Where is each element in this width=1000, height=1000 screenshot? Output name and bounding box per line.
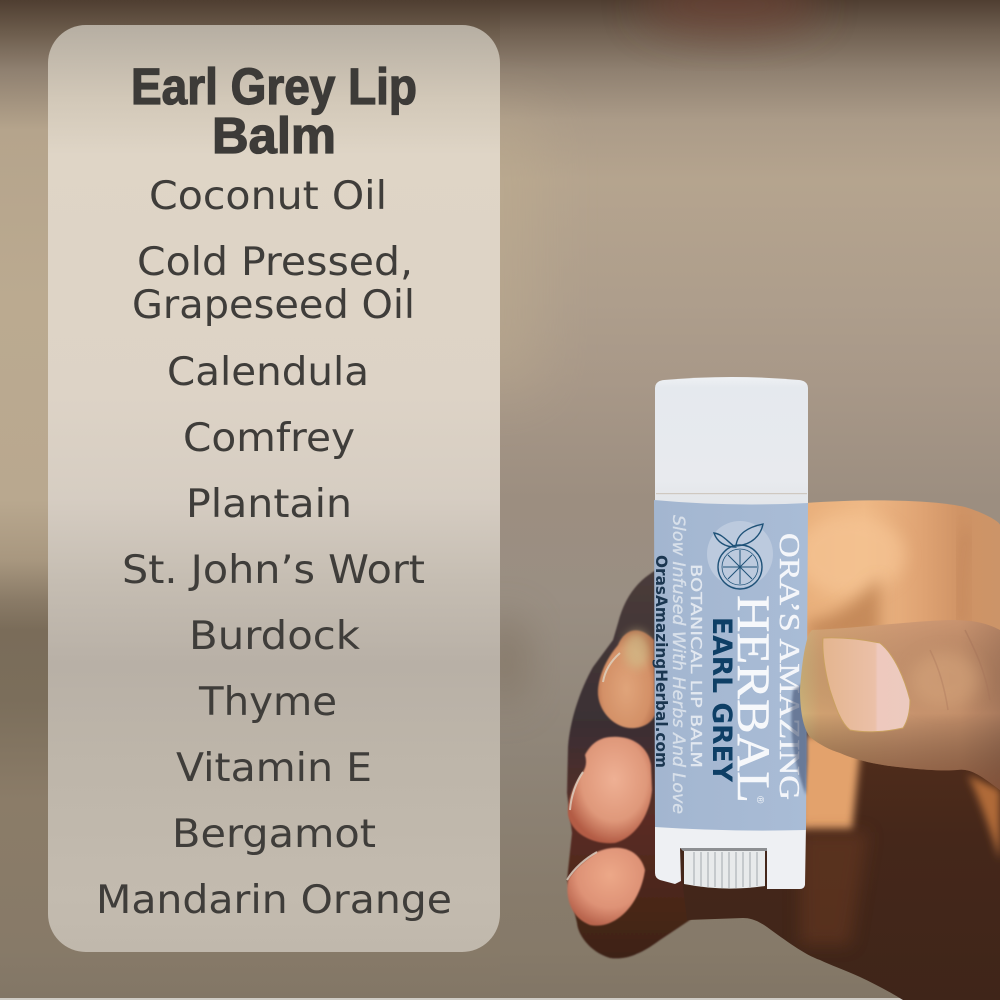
thumb: [791, 620, 1000, 795]
text block: ingredient names: Vitamin E: [176, 746, 372, 791]
text block: ingredient names: Plantain: [186, 482, 352, 527]
tube label: [652, 500, 808, 831]
text block: ingredient names: Comfrey: [183, 416, 355, 461]
label: product type: BOTANICAL LIP BALM: [687, 564, 705, 768]
label: registered mark: ®: [754, 796, 765, 804]
text block: ingredient names: St. John’s Wort: [122, 548, 425, 593]
label: brand: ORA’S AMAZING: [773, 533, 805, 800]
tube base with wheel: [655, 825, 806, 889]
heading: product name: Earl Grey Lip: [131, 58, 417, 115]
text block: ingredient names: Calendula: [167, 350, 369, 395]
product: lip balm tube: [652, 377, 808, 889]
hand holding the tube: [567, 500, 1000, 1000]
finger: lower left: [567, 848, 645, 926]
text block: ingredient names: Bergamot: [172, 812, 376, 857]
text block: ingredient names: [96, 174, 452, 923]
label: tagline: Slow Infused With Herbs And Love: [668, 515, 688, 814]
text block: ingredient names: Cold Pressed,: [137, 240, 413, 285]
label: website: OrasAmazingHerbal.com: [652, 555, 671, 768]
panel: ingredients list: [48, 25, 500, 952]
text block: ingredient names: Grapeseed Oil: [132, 283, 415, 328]
heading: product name: Balm: [212, 107, 336, 164]
palm in shadow: [680, 732, 1000, 1000]
logo: citrus and leaves: [707, 521, 773, 589]
label: flavour: EARL GREY: [706, 617, 737, 782]
heading: product name: [131, 58, 417, 164]
tube cap: [655, 377, 808, 505]
label: herbal: HERBAL: [727, 595, 779, 803]
finger: middle left: [568, 737, 652, 843]
text block: ingredient names: Thyme: [198, 680, 337, 725]
index finger behind tube: [807, 500, 1000, 640]
text block: ingredient names: Burdock: [189, 614, 360, 659]
finger: top left: [598, 630, 655, 728]
back of hand behind fingers: [567, 568, 720, 958]
text block: ingredient names: Coconut Oil: [149, 174, 387, 219]
text block: ingredient names: Mandarin Orange: [96, 878, 452, 923]
thumbnail: [823, 638, 910, 732]
